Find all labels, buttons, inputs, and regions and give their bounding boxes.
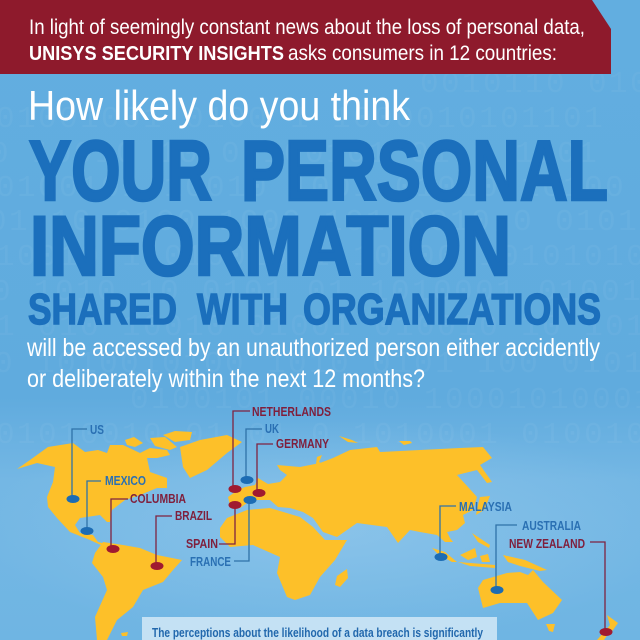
heading: shared with organizations [28, 285, 601, 334]
banner text: asks consumers in 12 countries: [288, 42, 557, 65]
infographic canvas: 0 1010010100 1010 0101 100 0101 [0, 347, 640, 382]
pin: Columbia [106, 492, 186, 553]
greenland [180, 435, 242, 478]
callout [142, 617, 497, 640]
pin: Germany [252, 437, 330, 497]
tasmania [546, 624, 555, 632]
infographic canvas: 0 1010 10 0101 01 1010001 01001 [0, 275, 640, 310]
banner text [29, 16, 585, 65]
pin: New Zealand [509, 537, 612, 636]
question text: or deliberately within the next 12 months? [27, 365, 425, 393]
caribbean islands and falklands [121, 632, 128, 636]
pin: France: FRANCE [190, 555, 231, 569]
new zealand [597, 615, 618, 640]
pin: US: US [90, 423, 104, 437]
pin: Brazil [150, 509, 212, 570]
infographic canvas: 01001001 0100 1 1000010101101 [0, 102, 605, 137]
australia [478, 570, 562, 620]
heading: question intro: How likely do you think [28, 82, 411, 129]
infographic canvas: 0100101 10010 1001 01010 10100 [0, 171, 626, 206]
indonesia and philippines [432, 548, 457, 562]
pin: Brazil: BRAZIL [175, 509, 212, 523]
pin: Australia [490, 519, 581, 594]
heading: shared with organizations: SHARED [28, 285, 177, 334]
pin: US [66, 423, 104, 503]
banner: intro [0, 0, 611, 74]
heading: your personal [29, 124, 608, 219]
pin: Mexico: MEXICO [105, 474, 146, 488]
pin: Mexico [80, 474, 146, 535]
pin: Netherlands [228, 405, 331, 493]
africa [220, 508, 347, 600]
pin: Germany: GERMANY [276, 437, 330, 451]
pin: Columbia: COLUMBIA [130, 492, 186, 506]
pin: Australia: AUSTRALIA [522, 519, 581, 533]
heading: information: INFORMATION [30, 199, 511, 293]
pin: UK [240, 422, 279, 484]
pin: New Zealand: NEW ZEALAND [509, 537, 585, 551]
banner text: UNISYS SECURITY INSIGHTS [29, 43, 284, 65]
heading: your personal: YOUR [29, 124, 212, 219]
question text [26, 334, 600, 393]
infographic canvas: 0 10010 10 0 100101 01 1 1001 [0, 137, 599, 172]
south america [92, 542, 182, 640]
japan [476, 496, 490, 515]
infographic canvas: 1 010 10010 01001 010010 10 101 [0, 310, 640, 345]
north america [17, 443, 170, 546]
world map [17, 431, 618, 640]
callout: The perceptions about the likelihood of a data breach is significantly [152, 626, 483, 640]
pin: UK: UK [265, 422, 279, 436]
pin: Netherlands: NETHERLANDS [252, 405, 331, 419]
eurasia [228, 447, 492, 543]
madagascar [335, 569, 348, 587]
pin: Spain: SPAIN [186, 537, 218, 551]
pin: Spain [186, 501, 242, 551]
pin: Malaysia: MALAYSIA [459, 500, 512, 514]
pin: Malaysia [434, 500, 512, 561]
infographic canvas: 10010 1 010010 1 10 00 10101010 [0, 240, 640, 275]
infographic canvas: 01 10 0100 1000 101 0010 0 0101 [0, 205, 639, 240]
uk and arctic islands east [339, 436, 358, 443]
heading: shared with organizations: WITH [197, 285, 288, 334]
banner text: In light of seemingly constant news about the loss of personal data, [29, 16, 585, 39]
arctic islands west [125, 437, 143, 447]
new guinea [503, 555, 547, 571]
pin: France [190, 496, 256, 569]
